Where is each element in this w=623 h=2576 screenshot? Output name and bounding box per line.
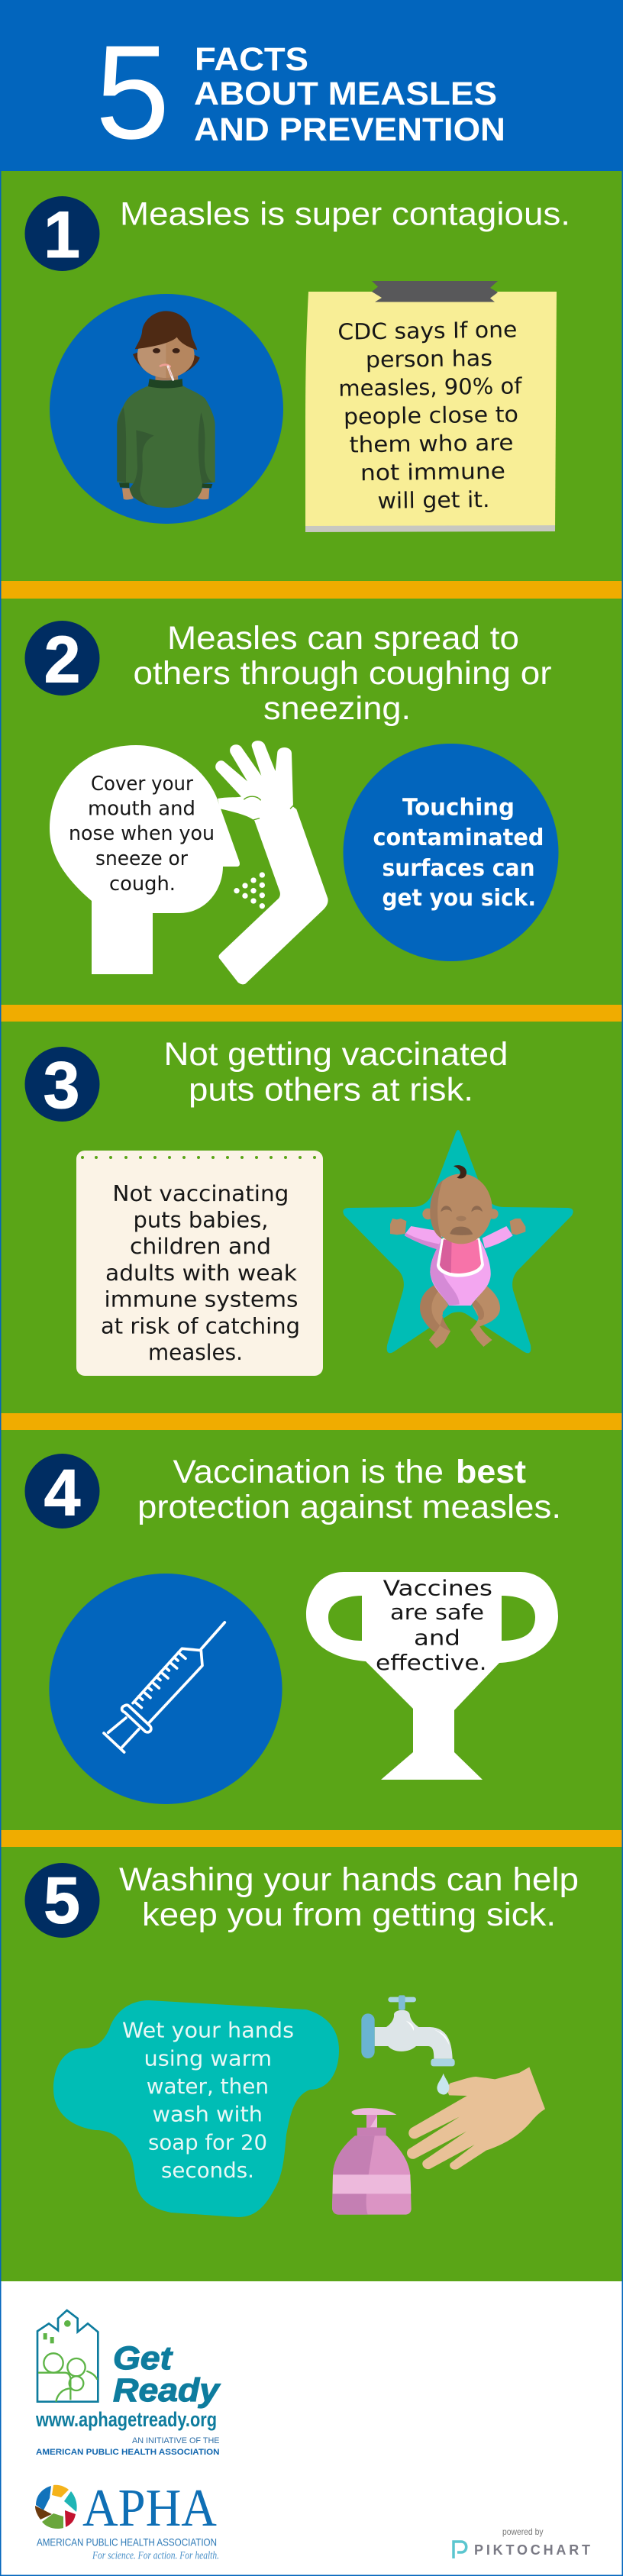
icon: teal star xyxy=(343,1130,573,1353)
number badge 2: 2 xyxy=(44,623,80,696)
card: not vaccinating: children and xyxy=(130,1234,271,1259)
heading: fact 3: Not getting vaccinated xyxy=(163,1037,508,1073)
card: not vaccinating: adults with weak xyxy=(105,1261,298,1286)
logo: Piktochart: PIKTOCHART xyxy=(474,2542,590,2558)
powered by label: powered by xyxy=(502,2526,544,2537)
website url: www.aphagetready.org xyxy=(35,2408,217,2431)
callout: teal blob with hand-washing text: using warm xyxy=(144,2046,272,2071)
panel: fact 5 xyxy=(0,1847,623,2281)
number badge 1 xyxy=(24,196,99,272)
callout: teal blob with hand-washing text: soap for 20 xyxy=(148,2130,267,2155)
note text: person has xyxy=(366,345,492,373)
number badge 5: 5 xyxy=(44,1864,80,1938)
note text: will get it. xyxy=(377,486,490,514)
logo: APHA color wheel xyxy=(35,2485,77,2529)
note text xyxy=(337,316,524,515)
panel: fact 4 xyxy=(0,1430,623,1830)
logo: Get Ready house xyxy=(37,2310,98,2402)
number badge 1: 1 xyxy=(44,199,80,272)
icon: trophy with text: effective. xyxy=(376,1650,487,1675)
icon: head silhouette with advice text: Cover your xyxy=(91,773,193,796)
logo wordmark: APHA: APHA xyxy=(82,2479,217,2538)
callout: contaminated surfaces: Touching xyxy=(402,794,515,822)
heading: fact 4: best xyxy=(456,1454,526,1490)
number badge 4: 4 xyxy=(44,1457,81,1530)
callout: contaminated surfaces xyxy=(344,744,559,961)
logo wordmark: Get Ready: Ready xyxy=(113,2372,221,2409)
blue circle behind sick person xyxy=(50,294,283,524)
APHA name: AMERICAN PUBLIC HEALTH ASSOCIATION xyxy=(37,2536,217,2549)
icon: head silhouette with advice text: mouth and xyxy=(88,797,195,820)
big number five: 5 xyxy=(95,18,169,167)
heading: fact 2: Measles can spread to xyxy=(167,621,519,657)
card: not vaccinating: puts babies, xyxy=(133,1208,269,1233)
note text: people close to xyxy=(344,401,518,430)
heading: fact 3 xyxy=(163,1037,508,1109)
callout: contaminated surfaces: get you sick. xyxy=(382,885,536,912)
note text: measles, 90% of xyxy=(338,373,522,402)
heading: fact 4 xyxy=(137,1454,561,1525)
panel: fact 2 xyxy=(0,599,623,1005)
icon: head silhouette with advice text: cough. xyxy=(109,873,176,896)
panel: fact 3 xyxy=(0,1022,623,1413)
callout: teal blob with hand-washing text xyxy=(53,2000,339,2217)
heading: fact 3: puts others at risk. xyxy=(189,1073,473,1109)
callout: contaminated surfaces: surfaces can xyxy=(382,855,534,882)
logo wordmark: Get Ready xyxy=(113,2340,221,2409)
icon: trophy with text: and xyxy=(414,1625,460,1651)
callout: teal blob with hand-washing text: seconds. xyxy=(161,2158,254,2183)
callout: teal blob with hand-washing text: water, then xyxy=(147,2074,269,2099)
number badge 2 xyxy=(24,621,99,696)
icon: raised arm covering a sneeze xyxy=(215,741,328,984)
icon: syringe xyxy=(104,1622,224,1752)
number badge 3: 3 xyxy=(44,1049,79,1122)
icon: faucet, water drop, hand and soap pump xyxy=(332,1995,545,2215)
heading: fact 2: others through coughing or xyxy=(133,656,551,692)
title text: AND PREVENTION xyxy=(194,111,505,148)
card: not vaccinating: measles. xyxy=(148,1340,243,1365)
heading: fact 4: Vaccination is the xyxy=(173,1454,444,1490)
initiative line xyxy=(36,2436,220,2457)
icon: head silhouette with advice text: sneeze or xyxy=(95,847,188,870)
heading: fact 2 xyxy=(133,621,551,727)
title text: FACTS xyxy=(195,41,308,78)
logo wordmark: Get Ready: Get xyxy=(113,2340,173,2377)
APHA tagline: For science. For action. For health. xyxy=(92,2550,219,2562)
callout: teal blob with hand-washing text: Wet your hands xyxy=(122,2018,294,2043)
initiative line: AN INITIATIVE OF THE xyxy=(132,2436,220,2445)
note text: not immune xyxy=(360,458,505,486)
panel: title header xyxy=(0,0,623,171)
heading: fact 2: sneezing. xyxy=(263,691,411,727)
note text: them who are xyxy=(349,430,514,458)
blue circle behind syringe xyxy=(49,1574,282,1804)
icon: trophy with text xyxy=(306,1572,558,1780)
number badge 5 xyxy=(24,1863,99,1938)
sticky note xyxy=(305,281,557,532)
card: not vaccinating: at risk of catching xyxy=(101,1314,300,1339)
heading: fact 5 xyxy=(119,1862,579,1933)
icon: head silhouette with advice text: nose when you xyxy=(69,822,215,845)
callout: teal blob with hand-washing text: wash with xyxy=(153,2101,263,2126)
number badge 3 xyxy=(24,1047,99,1122)
card: not vaccinating: Not vaccinating xyxy=(112,1181,289,1206)
callout: contaminated surfaces: contaminated xyxy=(373,825,544,851)
icon: sick person with thermometer xyxy=(117,311,215,508)
card: not vaccinating: immune systems xyxy=(104,1287,298,1312)
panel: footer logos xyxy=(0,2281,623,2576)
icon: tape on note xyxy=(372,281,498,302)
icon: crying baby xyxy=(390,1165,525,1348)
icon: trophy with text: Vaccines xyxy=(383,1576,492,1601)
heading: fact 4: protection against measles. xyxy=(137,1490,561,1525)
number badge 4 xyxy=(24,1454,99,1530)
card: not vaccinating xyxy=(76,1151,323,1376)
icon: head silhouette with advice text xyxy=(50,745,240,974)
note text: CDC says If one xyxy=(337,316,518,345)
icon: trophy with text: are safe xyxy=(390,1600,484,1625)
panel: fact 1 xyxy=(0,171,623,581)
title text: ABOUT MEASLES xyxy=(194,76,497,112)
initiative line: AMERICAN PUBLIC HEALTH ASSOCIATION xyxy=(36,2448,220,2457)
heading: fact 5: Washing your hands can help xyxy=(119,1862,579,1898)
heading: fact 1: Measles is super contagious. xyxy=(120,197,570,232)
heading: fact 5: keep you from getting sick. xyxy=(142,1897,556,1933)
title text xyxy=(194,41,505,148)
